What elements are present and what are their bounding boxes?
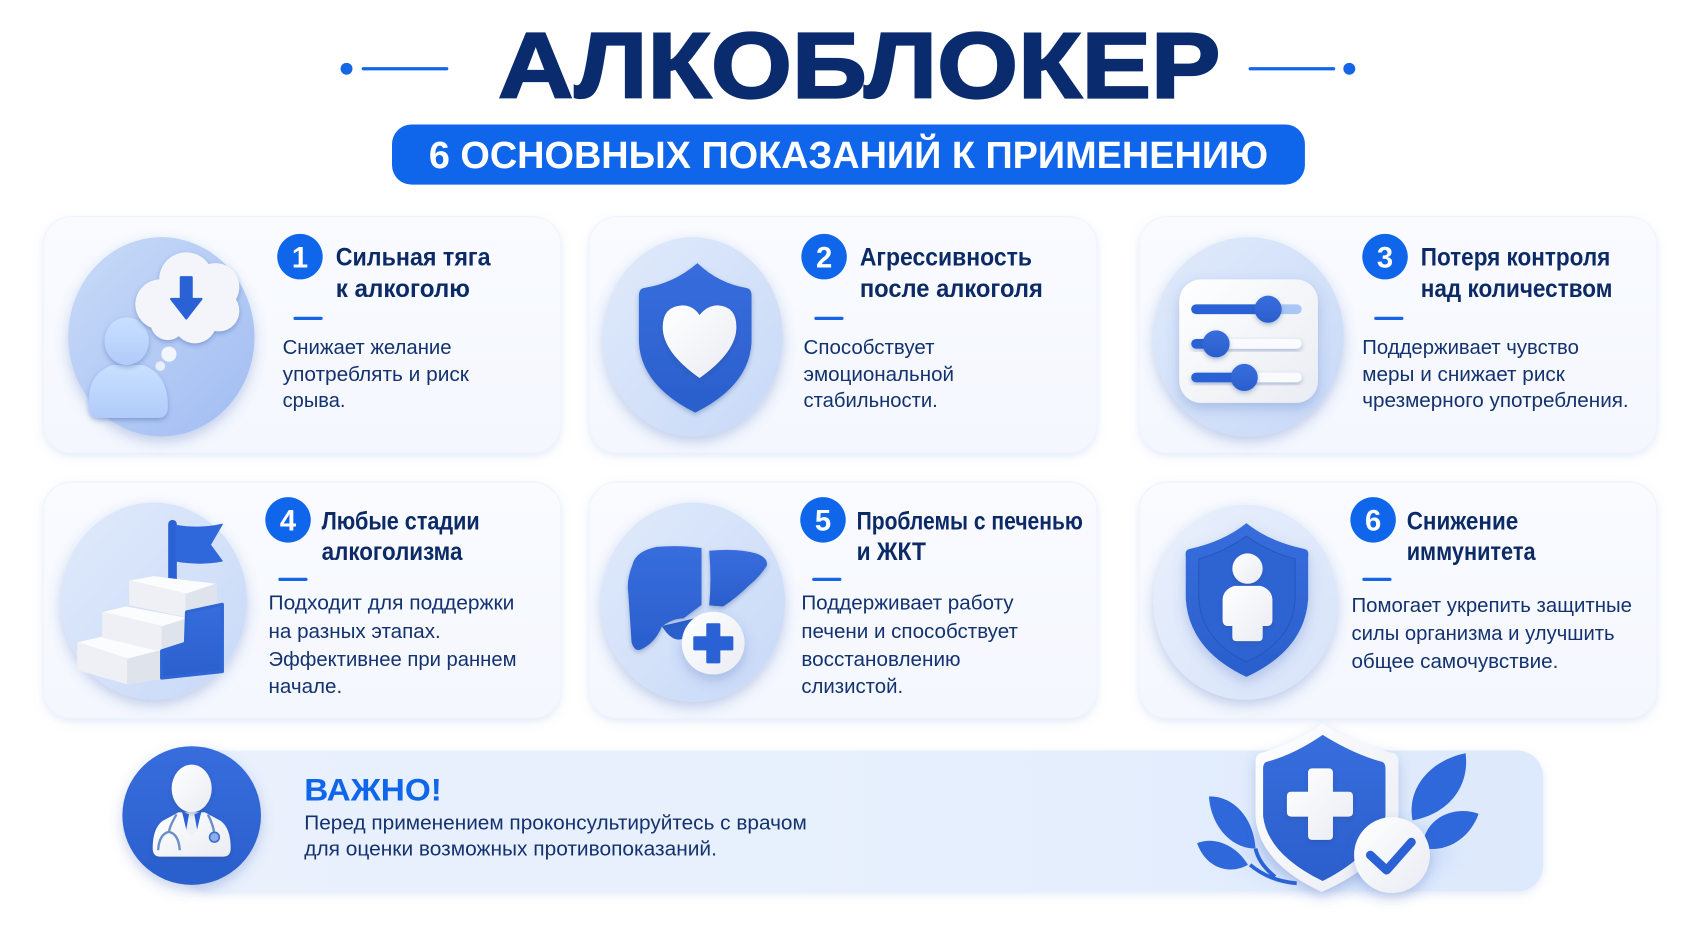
description: употреблять и риск bbox=[283, 364, 469, 386]
number badge 6 bbox=[1350, 497, 1396, 543]
heading bbox=[336, 243, 491, 303]
description bbox=[1351, 595, 1632, 673]
number badge 6: 6 bbox=[1365, 506, 1381, 538]
right title ornament bbox=[1249, 63, 1355, 75]
heading: над количеством bbox=[1421, 275, 1612, 303]
panel: card 5 bbox=[589, 482, 1097, 718]
number badge 3: 3 bbox=[1377, 243, 1393, 275]
heading: Любые стадии bbox=[322, 508, 480, 536]
heading: к алкоголю bbox=[336, 275, 470, 303]
description: Поддерживает работу bbox=[801, 593, 1014, 615]
icon: doctor bbox=[122, 746, 261, 885]
description: меры и снижает риск bbox=[1362, 364, 1565, 386]
number badge 5 bbox=[800, 497, 846, 543]
panel: important notice banner bbox=[122, 724, 1543, 893]
icon: control sliders bbox=[1153, 237, 1344, 436]
description: Подходит для поддержки bbox=[269, 593, 514, 615]
notice text bbox=[304, 813, 807, 861]
icon: shield with cross, check and leaves bbox=[1197, 724, 1479, 893]
description: восстановлению bbox=[801, 649, 961, 671]
heading: алкоголизма bbox=[322, 538, 463, 566]
notice text: Перед применением проконсультируйтесь с врачом bbox=[304, 813, 807, 835]
number badge 4: 4 bbox=[280, 506, 297, 538]
number badge 1 bbox=[277, 234, 323, 279]
subtitle pill bbox=[392, 125, 1305, 185]
number badge 2: 2 bbox=[816, 243, 832, 275]
description: Способствует bbox=[804, 337, 935, 359]
description: на разных этапах. bbox=[269, 621, 441, 643]
icon: person with craving thought cloud bbox=[68, 237, 254, 436]
description: Помогает укрепить защитные bbox=[1351, 595, 1632, 617]
description: срыва. bbox=[283, 390, 345, 412]
description bbox=[804, 337, 954, 412]
heading bbox=[1421, 243, 1612, 303]
number badge 3 bbox=[1362, 234, 1408, 279]
panel: card 2 bbox=[589, 217, 1097, 453]
icon: shield with heart bbox=[603, 237, 783, 436]
description: слизистой. bbox=[801, 676, 903, 698]
icon: liver with plus bbox=[601, 503, 785, 702]
heading: и ЖКТ bbox=[857, 538, 926, 566]
subtitle pill: 6 ОСНОВНЫХ ПОКАЗАНИЙ К ПРИМЕНЕНИЮ bbox=[429, 132, 1268, 177]
heading: после алкоголя bbox=[860, 275, 1043, 303]
description: начале. bbox=[269, 676, 342, 698]
heading: иммунитета bbox=[1407, 538, 1536, 566]
panel: card 3 bbox=[1139, 217, 1657, 453]
description bbox=[801, 593, 1018, 698]
heading: Потеря контроля bbox=[1421, 243, 1610, 271]
title: АЛКОБЛОКЕР bbox=[498, 13, 1220, 117]
heading: Агрессивность bbox=[860, 243, 1032, 271]
panel: card 1 bbox=[43, 217, 561, 453]
number badge 2 bbox=[801, 234, 847, 279]
description: силы организма и улучшить bbox=[1351, 623, 1615, 645]
description: чрезмерного употребления. bbox=[1362, 390, 1629, 412]
heading bbox=[1407, 508, 1536, 566]
panel: card 4 bbox=[43, 482, 561, 718]
number badge 4 bbox=[265, 497, 311, 543]
panel: card 6 bbox=[1139, 482, 1657, 718]
heading: Проблемы с печенью bbox=[857, 508, 1083, 536]
description: эмоциональной bbox=[804, 364, 954, 386]
description: печени и способствует bbox=[801, 621, 1018, 643]
description bbox=[1362, 337, 1629, 412]
heading bbox=[857, 508, 1083, 566]
heading: Сильная тяга bbox=[336, 243, 491, 271]
description: Снижает желание bbox=[283, 337, 452, 359]
heading bbox=[860, 243, 1043, 303]
icon: shield with person bbox=[1153, 505, 1337, 700]
number badge 5: 5 bbox=[815, 506, 831, 538]
number badge 1: 1 bbox=[292, 243, 308, 275]
description bbox=[269, 593, 517, 698]
description: Поддерживает чувство bbox=[1362, 337, 1579, 359]
description: стабильности. bbox=[804, 390, 938, 412]
left title ornament bbox=[341, 63, 448, 75]
heading bbox=[322, 508, 480, 566]
description bbox=[283, 337, 469, 412]
description: Эффективнее при раннем bbox=[269, 649, 517, 671]
notice text: для оценки возможных противопоказаний. bbox=[304, 839, 717, 861]
icon: stairs with flag bbox=[61, 503, 247, 700]
heading: important: ВАЖНО! bbox=[304, 772, 442, 807]
heading: Снижение bbox=[1407, 508, 1518, 536]
description: общее самочувствие. bbox=[1351, 651, 1558, 673]
